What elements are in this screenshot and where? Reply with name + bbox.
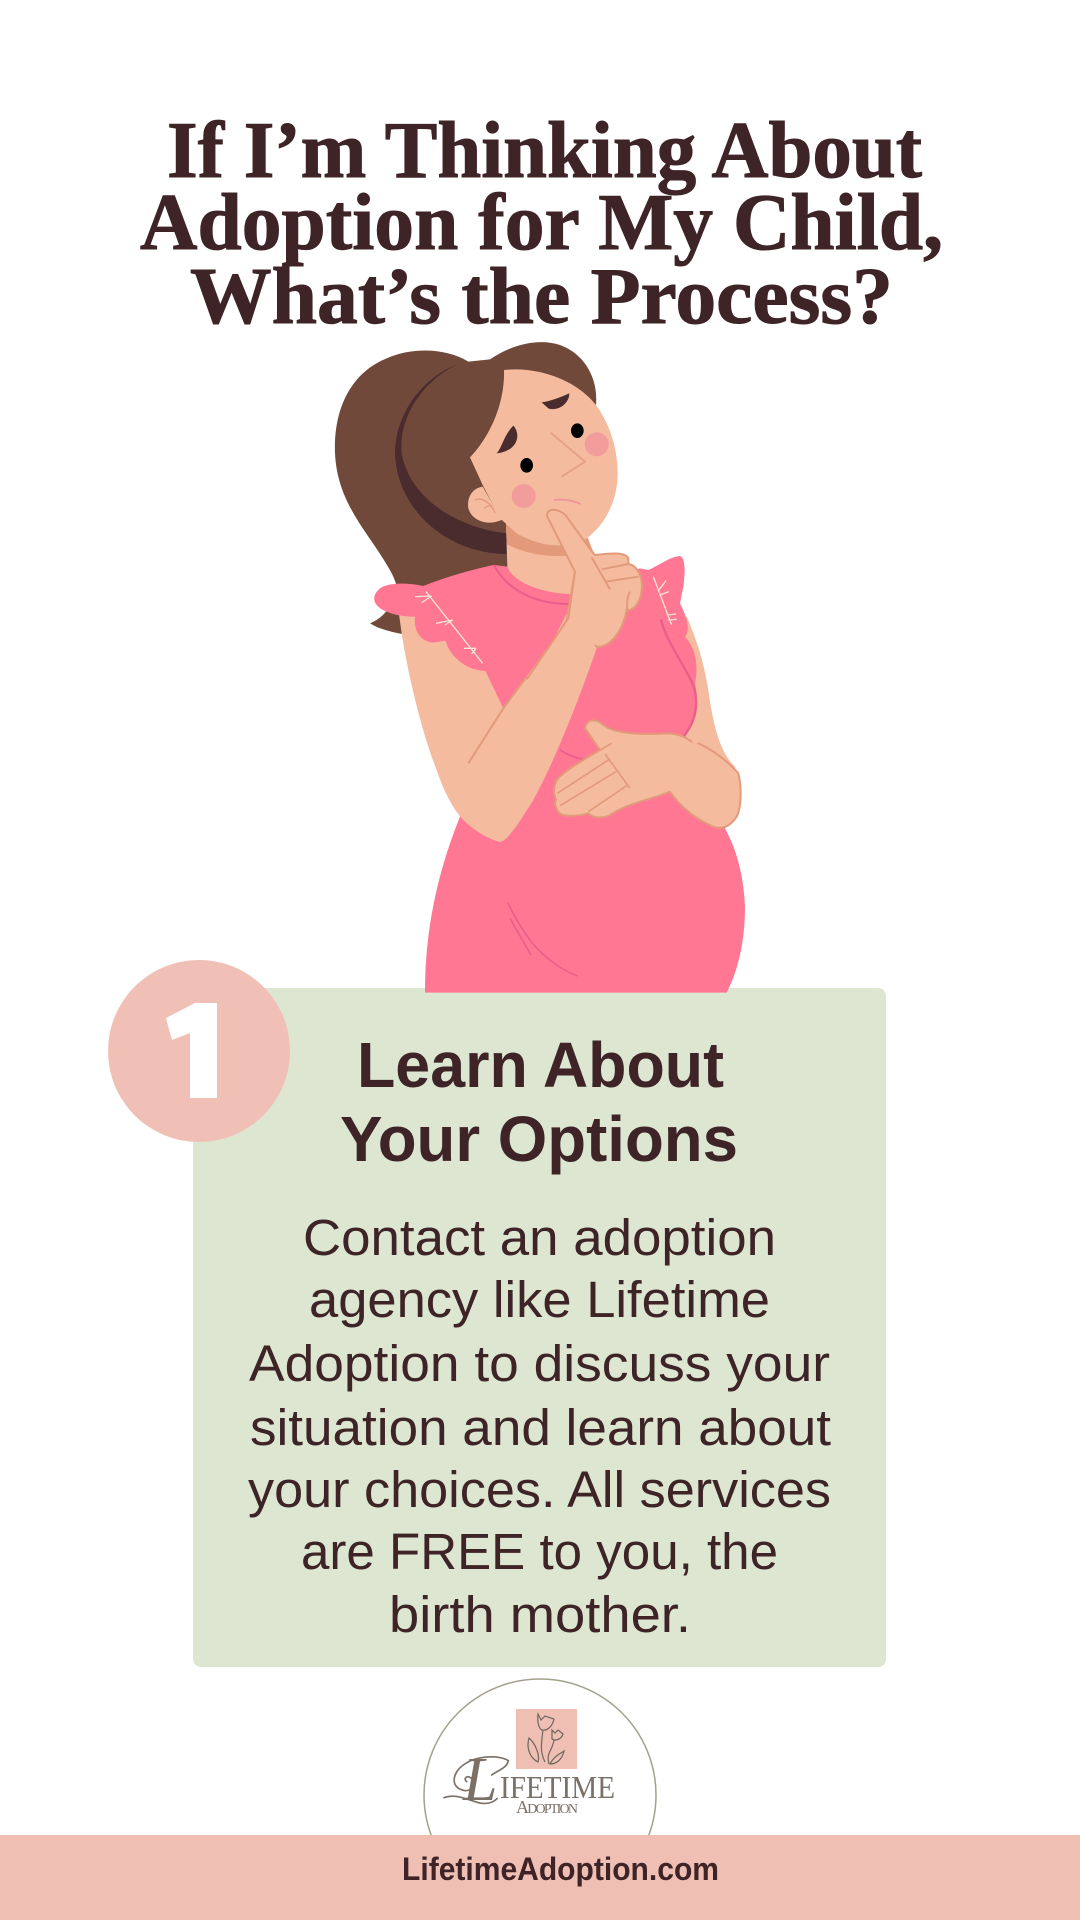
step body text: Contact an adoption bbox=[303, 1209, 776, 1266]
finger lines bbox=[557, 743, 630, 812]
logo wordmark: L bbox=[462, 1746, 497, 1814]
face bbox=[470, 369, 618, 545]
dress seams bbox=[508, 619, 696, 976]
arm cover bbox=[693, 741, 697, 743]
right sleeve stitches bbox=[653, 577, 677, 625]
right upper arm bbox=[667, 617, 737, 768]
ponytail tip bbox=[370, 587, 410, 635]
step body text: agency like Lifetime bbox=[309, 1271, 770, 1328]
bent arm bbox=[398, 610, 598, 842]
title bbox=[140, 107, 943, 341]
step body text: birth mother. bbox=[389, 1586, 691, 1643]
logo: ADOPTION bbox=[516, 1797, 578, 1817]
step body text bbox=[248, 1209, 831, 1643]
eyes bbox=[520, 423, 584, 473]
step heading: Learn About bbox=[357, 1029, 724, 1101]
collar bbox=[494, 565, 570, 604]
logo: IFETIME bbox=[500, 1769, 615, 1805]
resting hand and forearm bbox=[554, 720, 741, 828]
arm folds bbox=[468, 677, 527, 763]
step body text: are FREE to you, the bbox=[301, 1523, 778, 1580]
step heading bbox=[340, 1029, 738, 1175]
illustration: pregnant woman thinking bbox=[335, 342, 745, 993]
left sleeve bbox=[374, 577, 513, 680]
title: What’s the Process? bbox=[190, 253, 893, 341]
panel: step card bbox=[193, 988, 886, 1667]
step badge bbox=[108, 960, 290, 1142]
step body text: Adoption to discuss your bbox=[249, 1335, 830, 1392]
dress bbox=[423, 556, 745, 993]
numeral 1: 1 bbox=[158, 978, 233, 1127]
neck bbox=[506, 523, 593, 594]
left sleeve stitches bbox=[415, 592, 483, 663]
nose bbox=[551, 433, 585, 477]
mouth bbox=[554, 500, 581, 504]
step heading: Your Options bbox=[340, 1103, 738, 1175]
ear bbox=[468, 487, 502, 523]
footer band bbox=[0, 1835, 1080, 1920]
hair bbox=[335, 342, 596, 587]
footer url: LifetimeAdoption.com bbox=[402, 1851, 719, 1887]
headband bbox=[395, 364, 507, 554]
eyebrows bbox=[497, 393, 569, 453]
step body text: situation and learn about bbox=[250, 1399, 831, 1456]
thinking hand bbox=[547, 510, 642, 647]
logo bbox=[424, 1679, 656, 1911]
logo tulips bbox=[528, 1714, 564, 1764]
neck shadow bbox=[506, 524, 593, 556]
step body text: your choices. All services bbox=[248, 1461, 831, 1518]
title: If I’m Thinking About bbox=[167, 107, 922, 195]
logo script flourish bbox=[444, 1757, 508, 1803]
cheeks bbox=[512, 432, 609, 508]
title: Adoption for My Child, bbox=[140, 179, 943, 267]
logo tulip square bbox=[516, 1709, 577, 1769]
